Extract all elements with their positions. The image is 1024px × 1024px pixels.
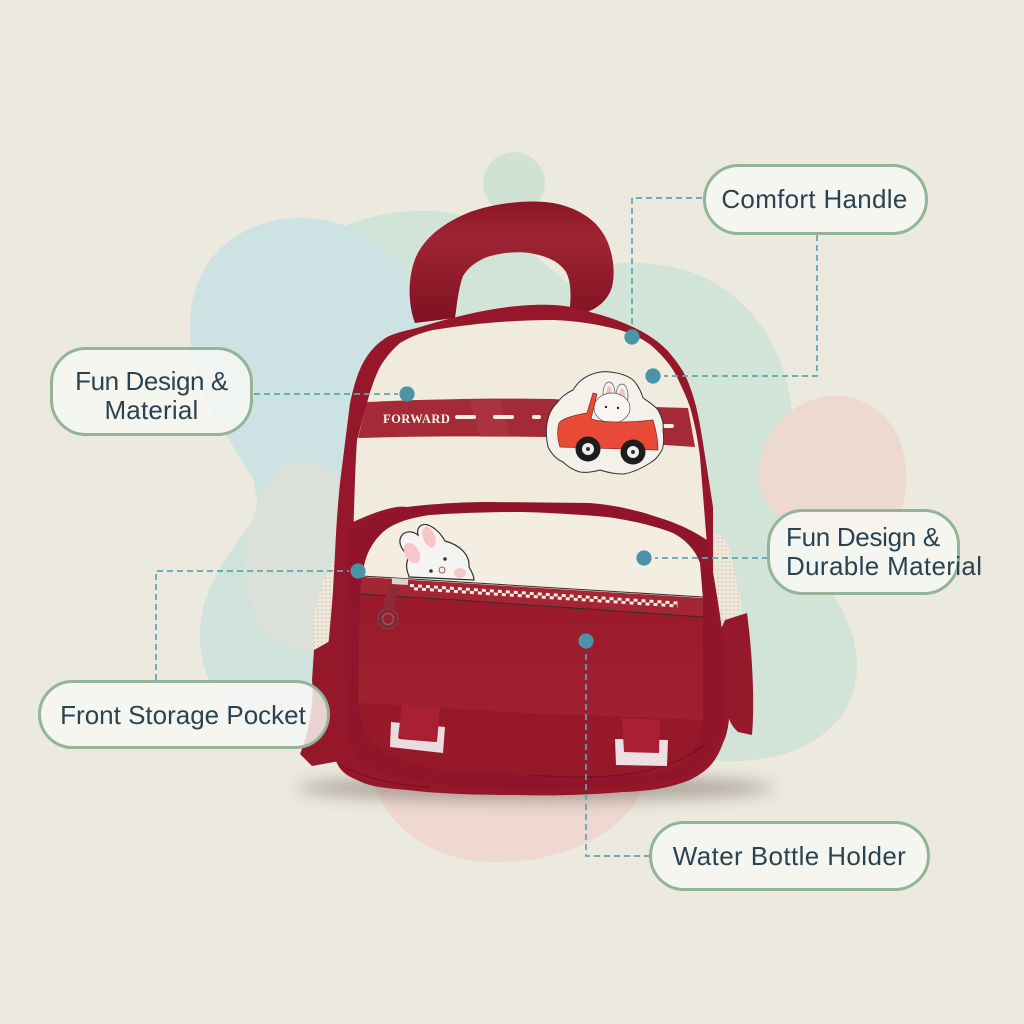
label: comfort handle: Comfort Handle: [721, 184, 908, 214]
bunny: [400, 524, 474, 580]
rabbit: [594, 382, 630, 423]
label: fun design and material: Material: [104, 395, 199, 425]
pocket bottom flap: [358, 703, 703, 776]
road stripe: [358, 399, 695, 447]
label: fun design and durable material: [767, 509, 960, 595]
car sticker: [546, 372, 664, 474]
mesh side pockets: [313, 533, 743, 650]
dashed leader lines: [156, 198, 817, 856]
handle: [410, 201, 614, 323]
pocket cream panel: [362, 512, 703, 599]
label: fun design and durable material: Fun Design &: [786, 522, 940, 552]
bottom seam: [337, 745, 705, 787]
left strap and buckle: [390, 705, 445, 753]
background blobs: [190, 152, 906, 862]
zipper band: [360, 577, 703, 617]
label: fun design and material: [50, 347, 253, 436]
label: water bottle holder: [649, 821, 930, 891]
label: water bottle holder: Water Bottle Holder: [673, 841, 906, 871]
label: comfort handle: [703, 164, 928, 235]
road dashes: [457, 417, 672, 426]
main body: [322, 305, 730, 795]
zipper pull: [378, 581, 408, 629]
backpack: [300, 201, 753, 795]
pocket lower face: [358, 594, 703, 720]
label: front storage pocket: [38, 680, 330, 749]
zipper teeth: [410, 586, 678, 606]
label: front storage pocket: Front Storage Pocket: [60, 700, 306, 730]
side pockets: [300, 613, 753, 766]
right strap and buckle: [615, 718, 668, 766]
road lettering: FORWARD: [383, 412, 450, 426]
leader dots: [350, 329, 661, 649]
red car: [558, 393, 658, 464]
top panel lower wedge edge: [347, 507, 407, 545]
cream top panel: [353, 320, 707, 545]
zipper edge lines: [360, 576, 703, 617]
front pocket rim: [345, 502, 724, 790]
label: fun design and durable material: Durable Material: [786, 551, 982, 581]
road highlight: [470, 400, 510, 437]
label: fun design and material: Fun Design &: [75, 366, 228, 396]
ground shadow: [297, 775, 773, 801]
